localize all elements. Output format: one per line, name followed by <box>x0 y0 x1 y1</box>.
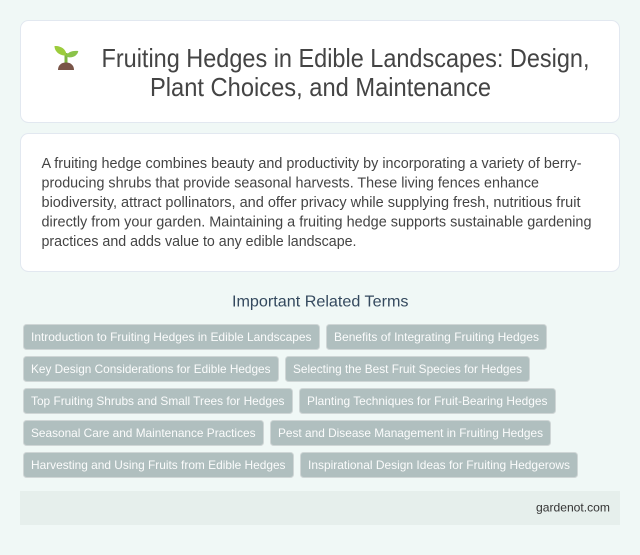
footer <box>20 491 620 525</box>
tag: benefits: Benefits of Integrating Fruiting Hedges <box>334 330 539 344</box>
tag: inspirational ideas <box>300 452 578 478</box>
title text <box>102 45 590 102</box>
paragraph text: practices and adds value to any edible landscape. <box>42 234 356 250</box>
tag: introduction <box>24 324 320 350</box>
tag: top shrubs <box>24 388 292 414</box>
tag: planting techniques <box>300 388 556 414</box>
paragraph text: biodiversity, attract pollinators, and offer privacy while supplying fresh, nutritious fruit <box>42 195 580 211</box>
tag: key design: Key Design Considerations for Edible Hedges <box>31 362 270 376</box>
tag: inspirational ideas: Inspirational Design Ideas for Fruiting Hedgerows <box>308 458 570 472</box>
tag: seasonal care <box>24 420 264 446</box>
footer source text: gardenot.com <box>536 501 610 515</box>
tag: harvesting: Harvesting and Using Fruits from Edible Hedges <box>31 458 286 472</box>
paragraph text: producing shrubs that provide seasonal harvests. These living fences enhance <box>42 176 539 192</box>
tag: pest and disease: Pest and Disease Management in Fruiting Hedges <box>278 426 543 440</box>
heading: important related terms: Important Related Terms <box>232 294 408 311</box>
tag: seasonal care: Seasonal Care and Maintenance Practices <box>31 426 256 440</box>
tag: key design <box>24 356 278 382</box>
panel: title card <box>20 20 620 122</box>
tag: pest and disease <box>270 420 550 446</box>
panel: introduction <box>20 134 620 272</box>
tag: selecting species <box>286 356 530 382</box>
tag: benefits <box>326 324 546 350</box>
paragraph text <box>42 156 592 250</box>
tag: introduction: Introduction to Fruiting Hedges in Edible Landscapes <box>31 330 312 344</box>
paragraph text: directly from your garden. Maintaining a fruiting hedge supports sustainable gardening <box>42 215 592 231</box>
title text: Plant Choices, and Maintenance <box>150 74 491 102</box>
title text: Fruiting Hedges in Edible Landscapes: Design, <box>102 45 590 73</box>
tag list <box>24 324 578 478</box>
icon: sprout <box>54 46 78 70</box>
paragraph text: A fruiting hedge combines beauty and productivity by incorporating a variety of berry- <box>42 156 582 172</box>
tag: selecting species: Selecting the Best Fruit Species for Hedges <box>293 362 522 376</box>
tag: harvesting <box>24 452 294 478</box>
tag: top shrubs: Top Fruiting Shrubs and Small Trees for Hedges <box>31 394 284 408</box>
tag: planting techniques: Planting Techniques for Fruit-Bearing Hedges <box>307 394 548 408</box>
